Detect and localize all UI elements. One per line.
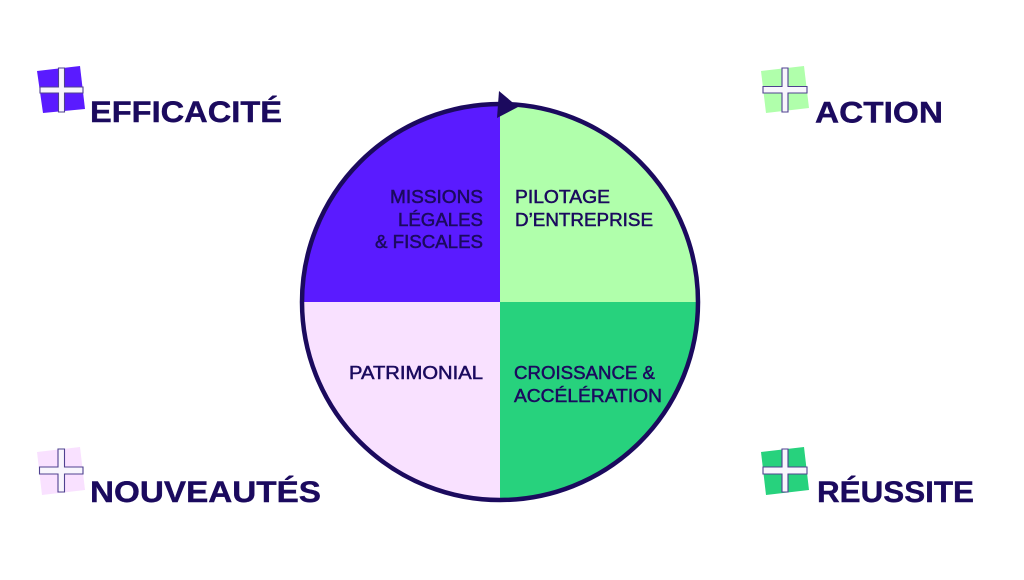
icon: plus nouveautés bbox=[37, 447, 85, 495]
heading: efficacité: EFFICACITÉ bbox=[90, 95, 282, 129]
quadrant: croissance & accélération bbox=[500, 302, 698, 500]
label: missions légales & fiscales: LÉGALES bbox=[398, 210, 483, 230]
label: croissance & accélération: ACCÉLÉRATION bbox=[514, 386, 662, 406]
quadrant: patrimonial bbox=[302, 302, 500, 500]
label: pilotage d'entreprise bbox=[515, 187, 653, 230]
label: missions légales & fiscales bbox=[375, 187, 483, 252]
label: croissance & accélération: CROISSANCE & bbox=[514, 363, 655, 383]
quadrant: missions légales & fiscales bbox=[302, 104, 500, 302]
heading: réussite: RÉUSSITE bbox=[817, 475, 974, 509]
icon: plus efficacité bbox=[37, 66, 85, 113]
quadrant: pilotage d'entreprise bbox=[500, 104, 698, 302]
label: pilotage d'entreprise: D’ENTREPRISE bbox=[515, 210, 653, 230]
arrow head bbox=[497, 91, 518, 118]
label: croissance & accélération bbox=[514, 363, 662, 406]
wheel diagram bbox=[302, 91, 698, 500]
label: missions légales & fiscales: MISSIONS bbox=[390, 187, 483, 207]
heading: action: ACTION bbox=[815, 96, 943, 130]
icon: plus action bbox=[761, 66, 809, 113]
label: pilotage d'entreprise: PILOTAGE bbox=[515, 187, 610, 207]
label: patrimonial: PATRIMONIAL bbox=[349, 363, 483, 383]
wheel outline bbox=[302, 104, 698, 500]
label: missions légales & fiscales: & FISCALES bbox=[375, 232, 483, 252]
icon: plus réussite bbox=[761, 447, 809, 495]
heading: nouveautés: NOUVEAUTÉS bbox=[90, 475, 321, 509]
